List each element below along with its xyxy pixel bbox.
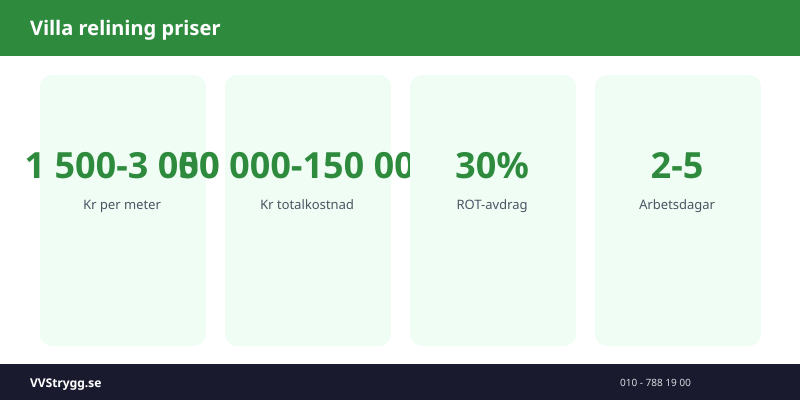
panel: price per meter [40, 75, 206, 346]
stat label: work days: Arbetsdagar [639, 195, 715, 213]
footer brand: VVStrygg.se [30, 374, 101, 391]
footer band [0, 364, 800, 400]
footer phone number: 010 - 788 19 00 [620, 375, 691, 389]
stat value: price per meter: 1 500-3 000 [24, 140, 219, 189]
panel: total cost [225, 75, 391, 346]
stat label: total cost: Kr totalkostnad [260, 195, 354, 213]
stat value: work days: 2-5 [651, 140, 703, 189]
panel: work days [595, 75, 761, 346]
header band [0, 0, 800, 56]
stat value: ROT deduction: 30% [455, 140, 529, 189]
title: Villa relining priser [30, 14, 220, 41]
stat label: price per meter: Kr per meter [83, 195, 161, 213]
stat label: ROT deduction: ROT-avdrag [456, 195, 528, 213]
panel: ROT deduction [410, 75, 576, 346]
stat value: total cost: 50 000-150 000 [179, 140, 435, 189]
